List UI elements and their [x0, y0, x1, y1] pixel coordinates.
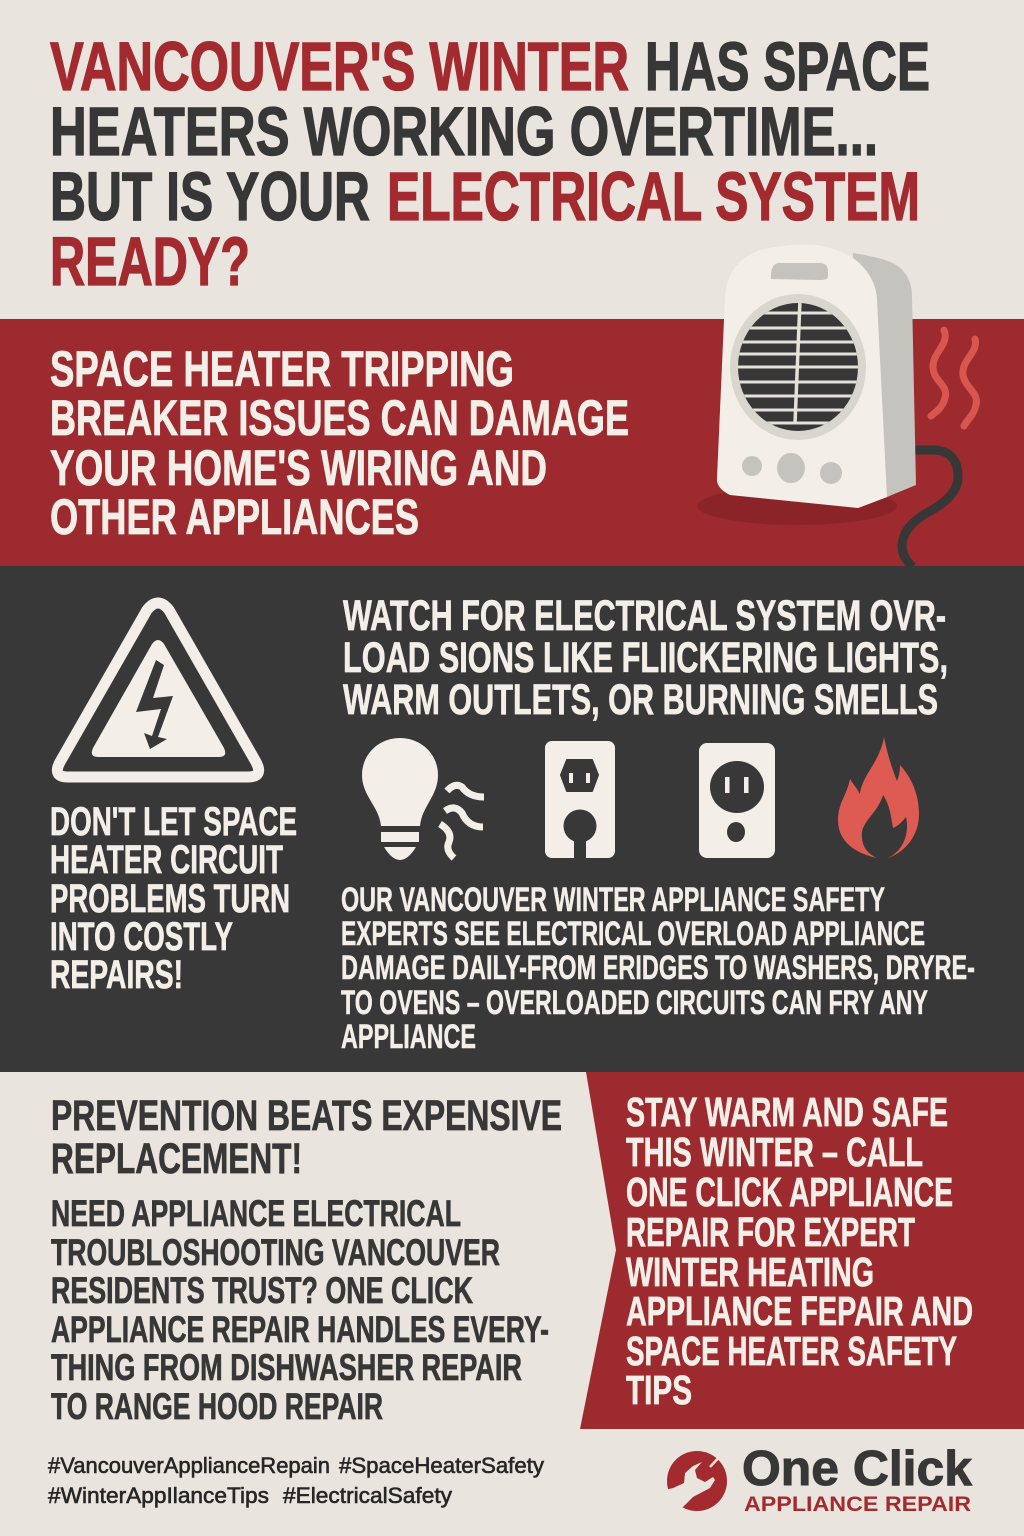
title: BUT IS YOUR: [50, 158, 370, 235]
prevention heading: PREVENTION BEATS EXPENSIVE: [51, 1092, 562, 1140]
prevention body text: [51, 1193, 549, 1427]
prevention body text: APPLIANCE REPAIR HANDLES EVERY-: [51, 1309, 549, 1350]
expert body text: APPLIANCE: [341, 1018, 476, 1056]
icon: flame: [838, 737, 919, 858]
warning text: PROBLEMS TURN: [50, 877, 290, 921]
expert body text: [341, 881, 975, 1056]
icon: wall outlet: [699, 743, 775, 858]
icon: flickering bulb: [362, 738, 484, 860]
logo tagline: APPLIANCE REPAIR: [744, 1493, 971, 1516]
prevention heading: REPLACEMENT!: [51, 1135, 302, 1183]
panel: red warning band: [0, 319, 1024, 566]
icon: warning triangle: [57, 603, 259, 777]
warning text: REPAIRS!: [50, 953, 183, 997]
red band text: BREAKER ISSUES CAN DAMAGE: [50, 390, 629, 446]
hashtags: #ElectricalSafety: [283, 1483, 452, 1508]
hashtags: [48, 1453, 544, 1508]
prevention body text: RESIDENTS TRUST? ONE CLICK: [51, 1270, 473, 1311]
prevention body text: TROUBLOSHOOTING VANCOUVER: [51, 1232, 500, 1273]
call to action text: TIPS: [626, 1367, 692, 1413]
prevention body text: NEED APPLIANCE ELECTRICAL: [51, 1193, 461, 1234]
hashtags: #SpaceHeaterSafety: [339, 1453, 544, 1478]
title: VANCOUVER'S WINTER: [50, 28, 629, 105]
overload signs heading: [343, 592, 948, 724]
panel: dark band: [0, 566, 1024, 1072]
prevention heading: [51, 1092, 562, 1183]
title: [50, 28, 930, 300]
prevention body text: THING FROM DISHWASHER REPAIR: [51, 1347, 522, 1388]
red band text: YOUR HOME'S WIRING AND: [50, 440, 547, 496]
icon: heat waves: [931, 330, 976, 426]
icon: space heater: [697, 245, 958, 567]
call to action text: [626, 1089, 973, 1413]
red band text: [50, 341, 629, 545]
call to action text: WINTER HEATING: [626, 1249, 874, 1295]
title: READY?: [50, 223, 250, 300]
hashtags: #VancouverApplianceRepain: [48, 1453, 330, 1478]
icon: warm outlet: [545, 741, 615, 858]
red band text: SPACE HEATER TRIPPING: [50, 341, 514, 397]
logo icon: wrench: [665, 1451, 727, 1511]
warning text: [50, 800, 297, 997]
panel: call to action: [580, 1072, 1024, 1429]
red band text: OTHER APPLIANCES: [50, 489, 419, 545]
warning text: HEATER CIRCUIT: [50, 838, 283, 882]
warning text: DON'T LET SPACE: [50, 800, 297, 844]
logo: One Click Appliance Repair: [665, 1442, 973, 1516]
prevention body text: TO RANGE HOOD REPAIR: [51, 1386, 383, 1427]
warning text: INTO COSTLY: [50, 915, 233, 959]
logo wordmark: One Click: [742, 1442, 973, 1496]
hashtags: #WinterAppIlanceTips: [48, 1483, 269, 1508]
